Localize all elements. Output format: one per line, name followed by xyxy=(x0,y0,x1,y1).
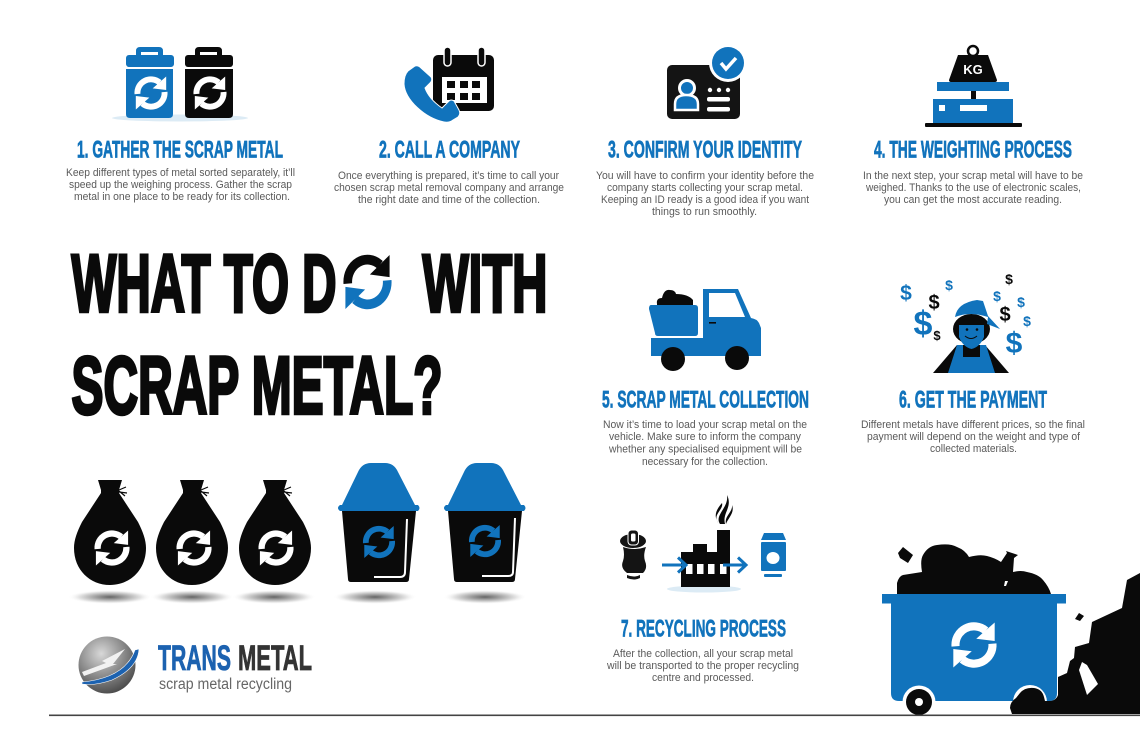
icon: ID card with check xyxy=(667,44,747,119)
icon: worker with dollar signs: $ xyxy=(914,305,933,343)
text: step 5 description: vehicle. Make sure to inform the company xyxy=(609,431,801,443)
rubbish heap in the dumpster xyxy=(897,544,1051,594)
illustration: lidded recycling bins xyxy=(333,463,527,604)
icon: truck with load xyxy=(649,289,761,371)
icon: worker with dollar signs: $ xyxy=(993,288,1001,304)
text: step 4 description: you can get the most accurate reading. xyxy=(884,194,1062,206)
text: step 3 description: You will have to confirm your identity before the xyxy=(596,170,814,182)
icon: worker with dollar signs xyxy=(900,271,1031,373)
text: step 3 description: company starts collecting your scrap metal. xyxy=(607,182,803,194)
text: step 4 description: weighed. Thanks to the use of electronic scales, xyxy=(865,182,1081,194)
logo: Trans Metal: TRANS xyxy=(158,639,231,678)
logo: Trans Metal xyxy=(78,636,312,694)
text: step 4 description xyxy=(863,170,1083,206)
text: step 3 description: Keeping an ID ready is a good idea if you want xyxy=(601,194,810,206)
text: step 6 description xyxy=(861,419,1085,455)
text: step 1 description: metal in one place to be ready for its collection. xyxy=(74,191,290,203)
text: step 7 description xyxy=(606,648,799,684)
text: step 1 description: speed up the weighing process. Gather the scrap xyxy=(69,179,292,191)
icon: kg weight on scale: KG xyxy=(963,62,983,77)
step 1: gather the scrap metal xyxy=(66,47,295,203)
text: step 7 description: centre and processed. xyxy=(652,672,754,684)
text: step 6 description: Different metals have different prices, so the final xyxy=(861,419,1085,431)
heading: step 3: 3. CONFIRM YOUR IDENTITY xyxy=(608,136,802,164)
icon: worker with dollar signs: $ xyxy=(1017,294,1025,310)
ground line xyxy=(49,714,1140,716)
text: step 2 description: Once everything is prepared, it’s time to call your xyxy=(338,170,559,182)
step 5: scrap metal collection xyxy=(602,289,809,468)
text: step 6 description: collected materials. xyxy=(930,443,1017,455)
step 3: confirm your identity xyxy=(596,44,814,218)
dumpster body xyxy=(891,603,1057,701)
logo: Trans Metal: scrap metal recycling xyxy=(159,676,292,693)
step 7: recycling process xyxy=(606,495,799,684)
icon: recycle arrows in title xyxy=(345,255,390,309)
text: step 1 description xyxy=(66,167,295,203)
text: step 4 description: In the next step, your scrap metal will have to be xyxy=(863,170,1083,182)
heading: step 1: 1. GATHER THE SCRAP METAL xyxy=(77,136,283,164)
text: step 7 description: After the collection, all your scrap metal xyxy=(613,648,793,660)
icon: worker with dollar signs: $ xyxy=(1023,313,1031,329)
text: step 6 description: payment will depend on the weight and type of xyxy=(867,431,1081,443)
icon: worker with dollar signs: $ xyxy=(999,304,1011,326)
icon: worker with dollar signs: $ xyxy=(900,282,912,305)
illustration: blue dumpster with rubbish xyxy=(882,544,1140,719)
icon: phone and calendar xyxy=(404,47,494,122)
rubbish heap on the right xyxy=(1010,573,1140,714)
icon: worker with dollar signs: $ xyxy=(928,292,940,314)
text: step 5 description: Now it’s time to load your scrap metal on the xyxy=(603,419,807,431)
heading: step 2: 2. CALL A COMPANY xyxy=(379,136,520,164)
text: step 3 description xyxy=(596,170,814,218)
icon: worker with dollar signs: $ xyxy=(933,328,941,343)
icon: two recycling bins xyxy=(112,47,248,122)
text: step 1 description: Keep different types of metal sorted separately, it’ll xyxy=(66,167,295,179)
icon: worker with dollar signs: $ xyxy=(1006,327,1023,360)
heading: step 7: 7. RECYCLING PROCESS xyxy=(621,616,786,642)
step 6: get the payment xyxy=(861,271,1085,455)
icon: metal sphere xyxy=(78,636,139,694)
step 2: call a company xyxy=(334,47,564,206)
icon: kg weight on scale xyxy=(925,46,1022,127)
main title: SCRAP METAL? xyxy=(72,340,442,432)
text: step 2 description xyxy=(334,170,564,206)
icon: worker with dollar signs: $ xyxy=(945,277,953,293)
main title xyxy=(72,238,548,432)
text: step 7 description: will be transported to the proper recycling xyxy=(606,660,799,672)
text: step 3 description: things to run smoothly. xyxy=(652,206,757,218)
text: step 2 description: chosen scrap metal removal company and arrange xyxy=(334,182,564,194)
text: step 2 description: the right date and time of the collection. xyxy=(358,194,540,206)
main title: WITH xyxy=(422,238,548,330)
icon: can, factory and recycled can xyxy=(620,495,786,592)
heading: step 5: 5. SCRAP METAL COLLECTION xyxy=(602,386,809,414)
text: step 5 description: necessary for the collection. xyxy=(642,456,768,468)
text: step 5 description xyxy=(603,419,807,468)
icon: worker with dollar signs: $ xyxy=(1005,271,1013,287)
dumpster wheel xyxy=(902,686,936,718)
main title: WHAT TO D xyxy=(72,238,336,330)
step 4: the weighting process xyxy=(863,46,1083,206)
illustration: garbage bags xyxy=(68,480,316,604)
text: step 5 description: whether any specialised equipment will be xyxy=(608,444,802,456)
logo: Trans Metal: METAL xyxy=(238,639,312,678)
